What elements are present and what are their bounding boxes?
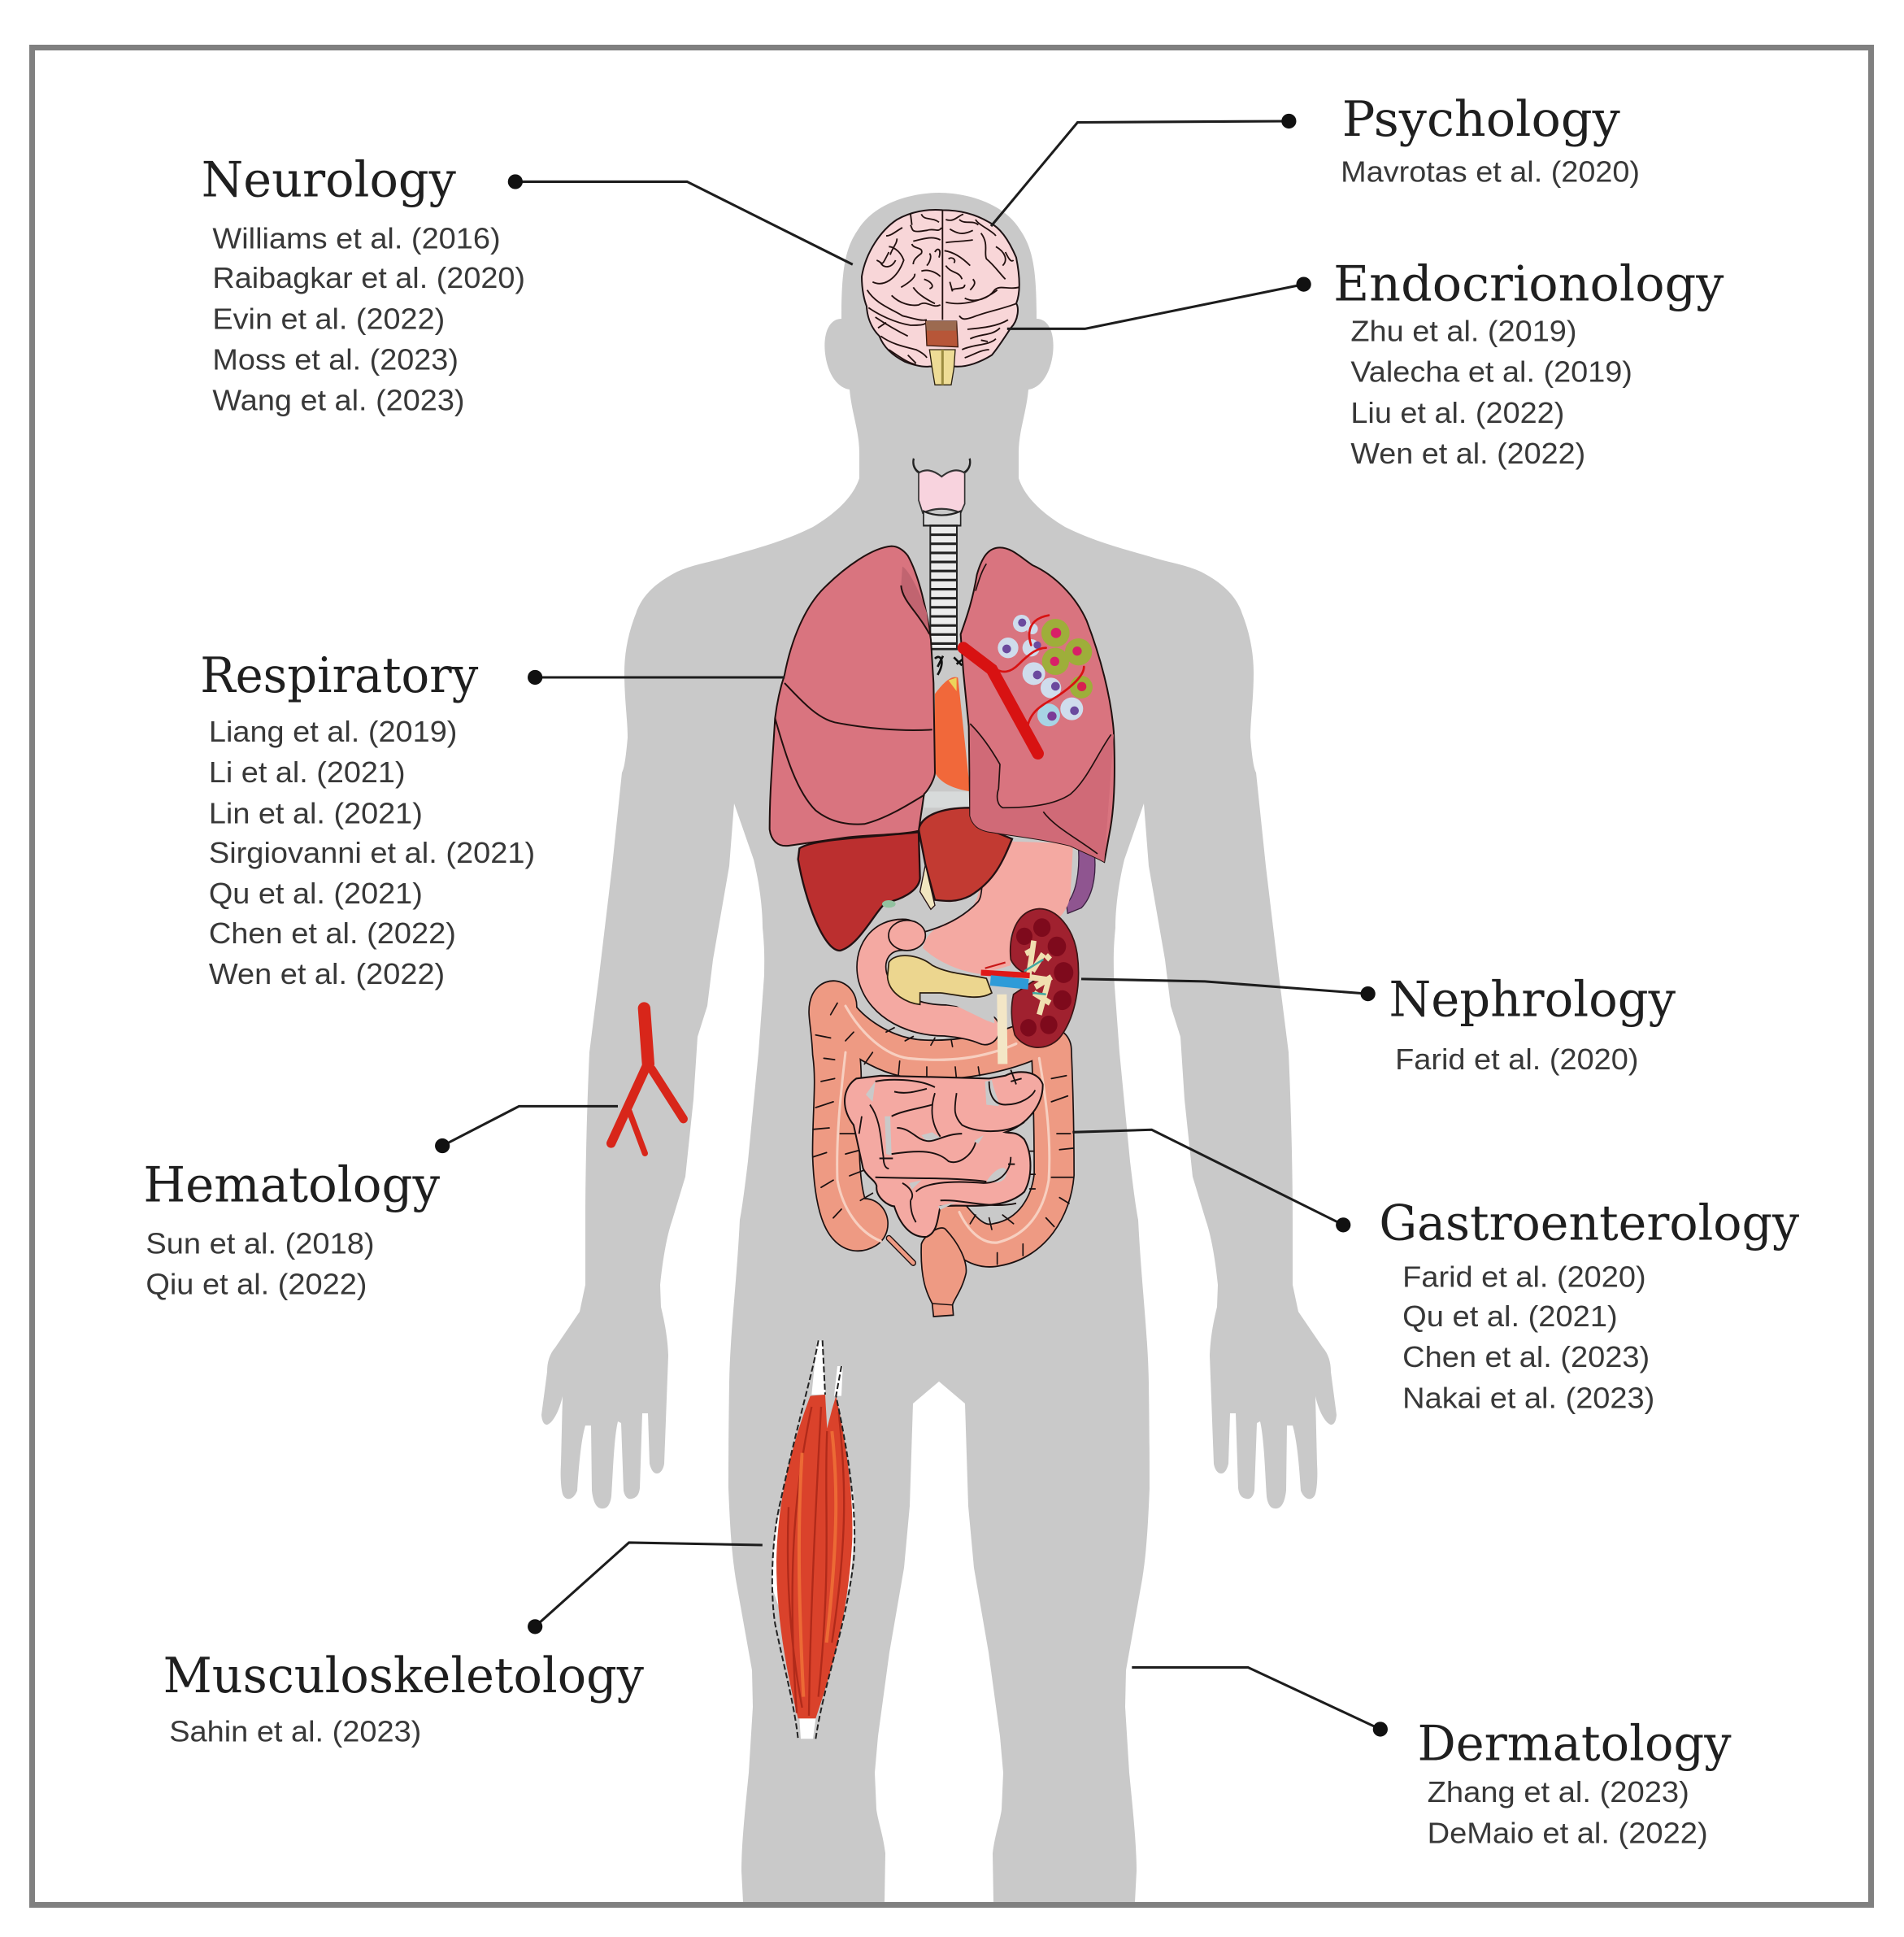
icon: large intestine: [813, 1003, 1073, 1317]
icon: spleen: [1067, 848, 1095, 913]
icon: stomach: [923, 841, 1073, 974]
icon: lungs: [770, 546, 1115, 862]
left lung (viewer right): [961, 547, 1115, 862]
leader line: respiratory: [528, 670, 785, 685]
heading: dermatology: Dermatology: [1417, 1716, 1732, 1772]
citations: endocrinology: Wen et al. (2022): [1350, 437, 1585, 470]
citations: neurology: Raibagkar et al. (2020): [212, 261, 525, 294]
citations: respiratory: Qu et al. (2021): [209, 877, 423, 910]
citations: hematology: Sun et al. (2018): [146, 1226, 375, 1260]
citations: respiratory: Liang et al. (2019): [209, 715, 457, 748]
icon: skeletal muscle: [772, 1340, 854, 1739]
citations: respiratory: [209, 715, 535, 990]
leader line: hematology: [435, 1106, 618, 1153]
panel: musculoskeletology: [163, 1648, 644, 1748]
panel: dermatology: [1417, 1716, 1732, 1849]
citations: endocrinology: Zhu et al. (2019): [1350, 315, 1577, 348]
citations: dermatology: DeMaio et al. (2022): [1428, 1816, 1708, 1849]
citations: neurology: [212, 222, 525, 417]
heading: respiratory: Respiratory: [200, 648, 478, 704]
icon: brain: [862, 210, 1019, 385]
citations: dermatology: [1428, 1775, 1708, 1849]
citations: psychology: Mavrotas et al. (2020): [1341, 155, 1640, 188]
leader line: nephrology: [1081, 979, 1376, 1001]
citations: hematology: [146, 1226, 375, 1300]
leader line: musculoskeletology: [528, 1543, 763, 1634]
citations: endocrinology: Liu et al. (2022): [1350, 396, 1564, 429]
citations: gastroenterology: Qu et al. (2021): [1402, 1299, 1618, 1333]
panel: gastroenterology: [1379, 1196, 1799, 1414]
icon: pancreas: [888, 955, 992, 1004]
panel: neurology: [202, 153, 525, 417]
citations: neurology: Wang et al. (2023): [212, 384, 465, 417]
citations: gastroenterology: [1402, 1260, 1654, 1414]
icon: blood vessel: [611, 1008, 684, 1153]
heading: gastroenterology: Gastroenterology: [1379, 1196, 1799, 1252]
icon: duodenum: [872, 921, 994, 1029]
tumour cells: [998, 615, 1093, 726]
citations: respiratory: Chen et al. (2022): [209, 916, 456, 950]
citations: respiratory: Wen et al. (2022): [209, 957, 445, 990]
icon: larynx and trachea: [913, 459, 970, 649]
citations: gastroenterology: Chen et al. (2023): [1402, 1340, 1650, 1373]
citations: respiratory: Lin et al. (2021): [209, 796, 423, 829]
pulmonary vessel: [963, 616, 1084, 754]
icon: liver: [798, 807, 1012, 951]
body silhouette: [541, 193, 1337, 1902]
panel: psychology: [1341, 92, 1640, 188]
leader line: dermatology: [1132, 1667, 1388, 1737]
citations: neurology: Moss et al. (2023): [212, 342, 459, 376]
icon: small intestine: [845, 1070, 1043, 1237]
citations: dermatology: Zhang et al. (2023): [1428, 1775, 1689, 1809]
right lung (viewer left): [770, 546, 935, 846]
panel: endocrinology: [1333, 256, 1724, 470]
citations: neurology: Williams et al. (2016): [212, 222, 501, 255]
citations: endocrinology: [1350, 315, 1632, 470]
heading: musculoskeletology: Musculoskeletology: [163, 1648, 644, 1704]
leader line: psychology: [991, 114, 1296, 226]
citations: nephrology: Farid et al. (2020): [1395, 1042, 1639, 1076]
panel: hematology: [143, 1157, 440, 1300]
leader line: gastroenterology: [1072, 1130, 1350, 1232]
citations: hematology: Qiu et al. (2022): [146, 1267, 367, 1300]
heading: neurology: Neurology: [202, 153, 456, 209]
icon: kidney: [981, 908, 1079, 1064]
citations: gastroenterology: Farid et al. (2020): [1402, 1260, 1646, 1293]
heading: psychology: Psychology: [1342, 92, 1620, 148]
citations: respiratory: Sirgiovanni et al. (2021): [209, 836, 535, 869]
leader line: endocrinology: [1007, 276, 1311, 329]
citations: endocrinology: Valecha et al. (2019): [1350, 355, 1632, 389]
heading: endocrinology: Endocrionology: [1333, 256, 1724, 312]
panel: nephrology: [1389, 972, 1676, 1076]
heading: hematology: Hematology: [143, 1157, 440, 1213]
citations: respiratory: Li et al. (2021): [209, 755, 406, 789]
citations: musculoskeletology: Sahin et al. (2023): [169, 1715, 421, 1748]
citations: neurology: Evin et al. (2022): [212, 302, 445, 335]
icon: heart and bronchi: [924, 651, 970, 807]
panel: respiratory: [200, 648, 535, 990]
citations: gastroenterology: Nakai et al. (2023): [1402, 1381, 1654, 1414]
heading: nephrology: Nephrology: [1389, 972, 1676, 1028]
leader line: neurology: [508, 174, 853, 264]
